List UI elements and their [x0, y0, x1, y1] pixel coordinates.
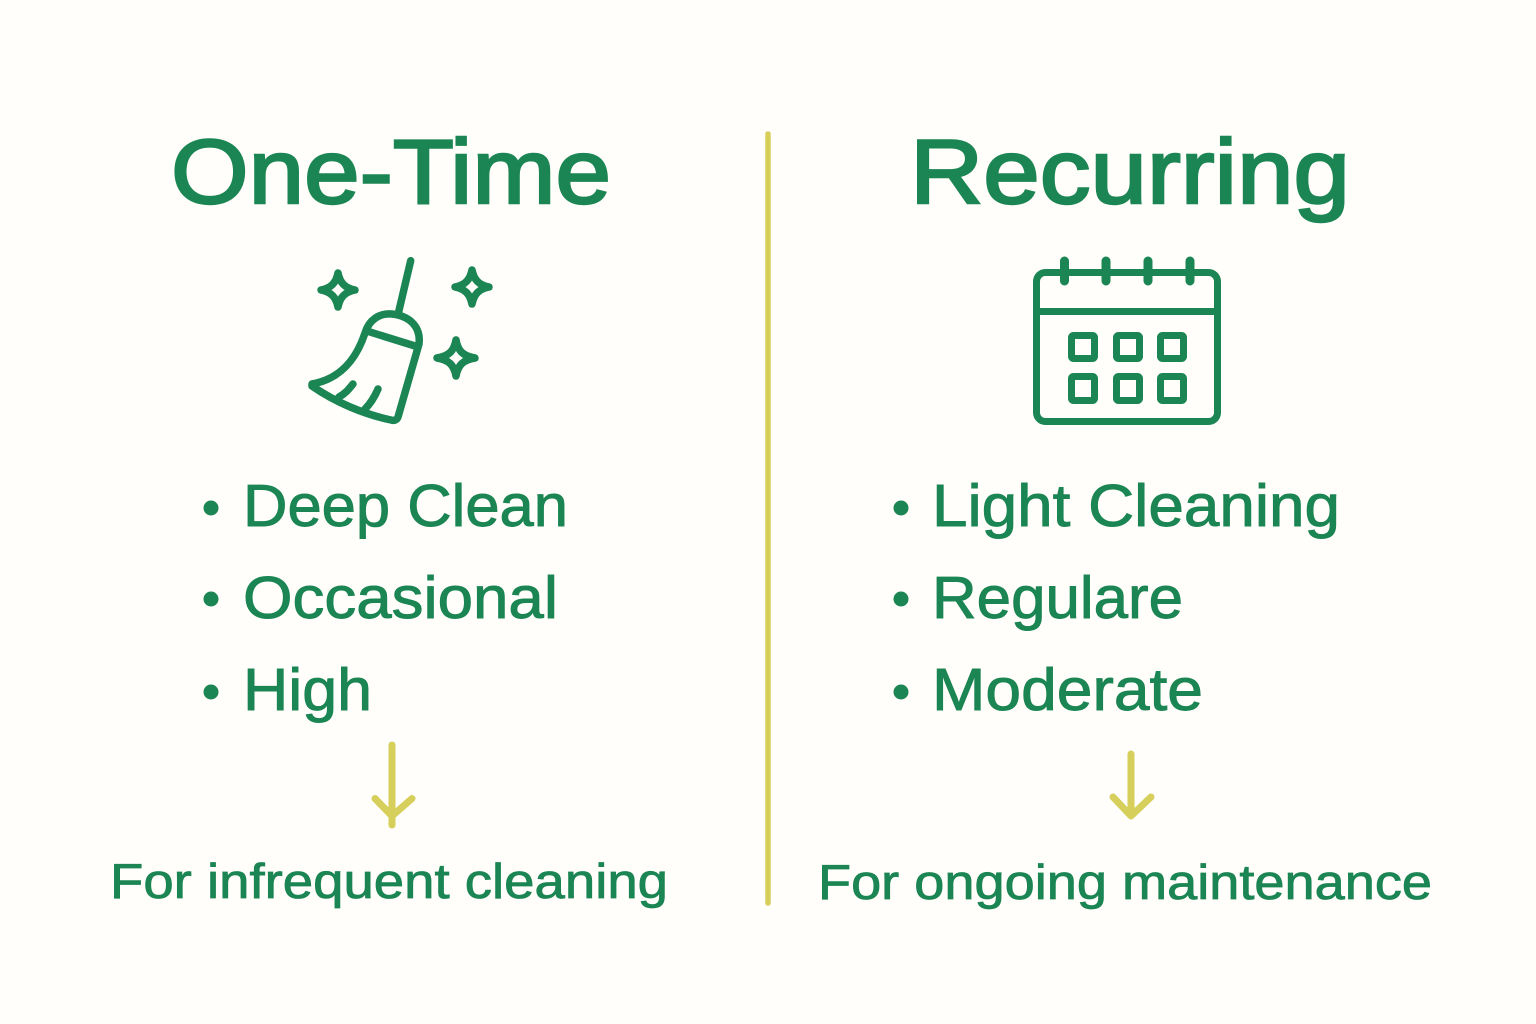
item: High: High — [243, 657, 372, 723]
heading: One-Time: One-Time — [171, 122, 611, 223]
list: recurring traits — [894, 473, 1340, 723]
note: for ongoing maintenance: For ongoing maintenance — [818, 856, 1432, 910]
arrow: down to recurring note — [1113, 754, 1151, 816]
arrow: down to one-time note — [375, 745, 412, 825]
item: Regulare: Regulare — [932, 565, 1183, 631]
panel: recurring — [818, 122, 1432, 910]
item: Deep Clean: Deep Clean — [243, 473, 568, 539]
item: Moderate: Moderate — [932, 657, 1203, 723]
item: Light Cleaning: Light Cleaning — [932, 473, 1340, 539]
list: one-time traits — [204, 473, 568, 723]
item: Occasional: Occasional — [243, 565, 558, 631]
panel: one-time — [110, 122, 668, 909]
icon: broom with sparkles — [312, 261, 489, 420]
center divider — [765, 134, 771, 903]
icon: calendar — [1036, 261, 1218, 422]
note: for infrequent cleaning: For infrequent cleaning — [110, 855, 668, 909]
heading: Recurring: Recurring — [910, 122, 1350, 223]
